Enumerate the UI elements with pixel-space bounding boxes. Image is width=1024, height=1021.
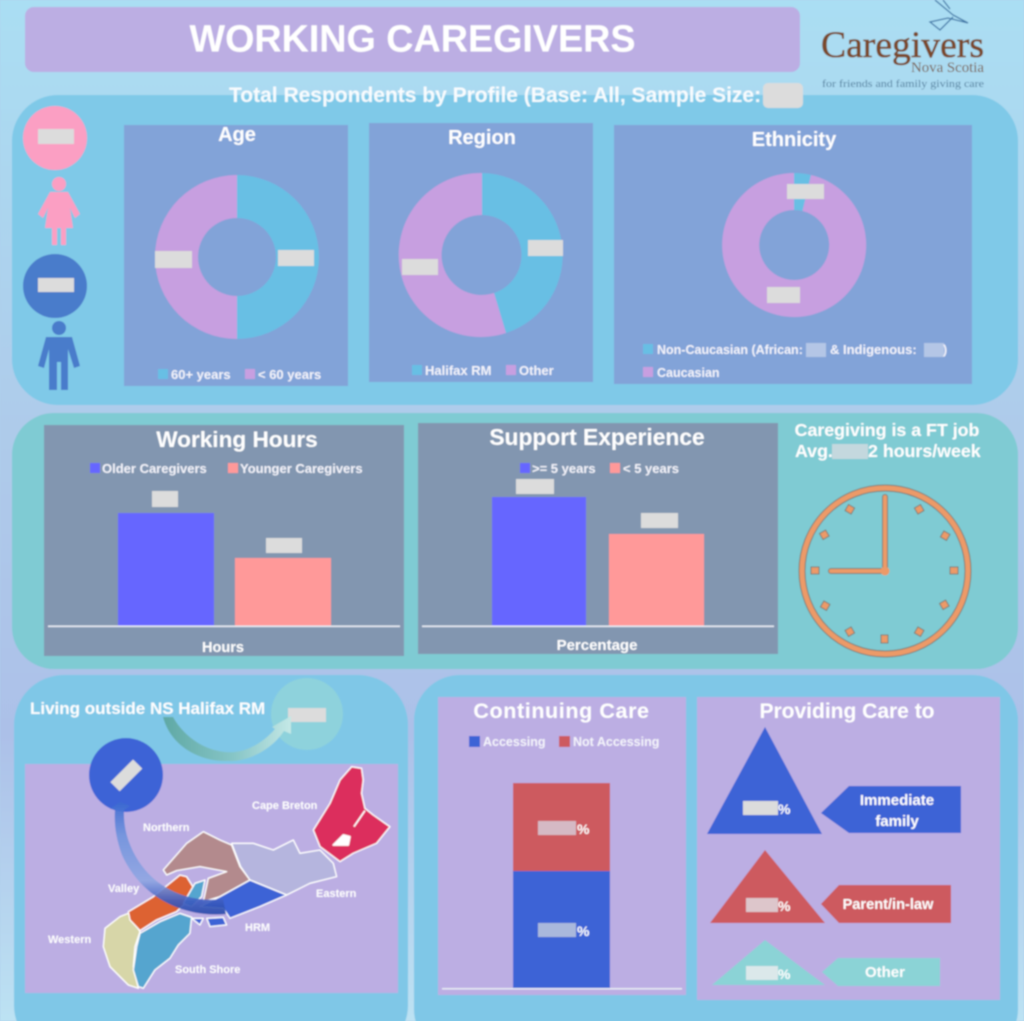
panel: region donut chart: Other (519, 363, 554, 378)
callout: immediate family: family (875, 813, 919, 830)
callout: immediate family (821, 786, 961, 833)
title banner: WORKING CAREGIVERS (190, 18, 636, 60)
bar chart: working hours: Older Caregivers (102, 461, 207, 476)
callout: other: Other (865, 964, 905, 981)
triangle: parent in-law (710, 850, 825, 923)
bar chart: support experience (418, 423, 778, 654)
map region labels: Western (48, 934, 91, 946)
callout: other (822, 958, 940, 986)
circle: Halifax percentage (271, 678, 343, 750)
triangle: parent in-law: % (778, 898, 791, 914)
bar chart: working hours: Hours (202, 640, 244, 656)
bar chart: support experience: Percentage (557, 637, 637, 654)
triangle: other (712, 940, 825, 985)
panel: total respondents (12, 83, 1018, 405)
callout: caregiving hours: Avg. (795, 441, 833, 461)
callout: parent in-law: Parent/in-law (843, 897, 934, 913)
map background (25, 764, 398, 993)
panel: age donut chart (124, 124, 348, 386)
callout: immediate family: Immediate (860, 792, 934, 809)
logo: Caregivers Nova Scotia: Caregivers (821, 25, 984, 66)
callout: parent in-law (821, 885, 951, 923)
triangle: immediate family: % (778, 801, 791, 817)
title banner (25, 7, 800, 72)
stacked bar chart: continuing care: Continuing Care (473, 699, 650, 723)
panel: providing care to (697, 697, 1000, 1000)
panel: ethnicity donut chart (614, 125, 972, 384)
stacked bar chart: continuing care: % (577, 923, 590, 939)
male icon with percentage (23, 254, 87, 390)
panel: working time (12, 413, 1018, 669)
bar chart: working hours: Younger Caregivers (240, 461, 363, 476)
stacked bar chart: continuing care: % (577, 821, 590, 837)
map region labels: South Shore (175, 964, 240, 976)
triangle: other: % (778, 966, 791, 982)
logo: Caregivers Nova Scotia (821, 0, 984, 90)
panel: region donut chart: Region (448, 127, 516, 149)
map region labels: Northern (143, 822, 190, 834)
panel: living outside Halifax (14, 675, 408, 1021)
logo: Caregivers Nova Scotia: for friends and family giving care (822, 79, 984, 90)
stacked bar chart: continuing care (438, 697, 686, 995)
stacked bar chart: continuing care: Not Accessing (573, 735, 659, 749)
triangle: immediate family (707, 727, 822, 834)
bar chart: support experience: < 5 years (623, 461, 679, 476)
arrow: blue curve (110, 802, 226, 914)
icon: clock (802, 488, 968, 654)
logo: Caregivers Nova Scotia: Nova Scotia (911, 60, 984, 76)
map region labels: HRM (245, 922, 270, 934)
stacked bar chart: continuing care: Accessing (483, 735, 546, 749)
panel: age donut chart: 60+ years (171, 367, 231, 382)
panel: ethnicity donut chart: Ethnicity (752, 129, 837, 151)
panel: age donut chart: < 60 years (258, 367, 321, 382)
bar chart: working hours: Working Hours (156, 427, 318, 452)
panel: ethnicity donut chart: ) (943, 343, 947, 357)
heading: living outside: Living outside NS Halifax RM (30, 699, 265, 718)
map region labels: Eastern (316, 888, 357, 900)
map region labels (48, 800, 357, 976)
bar chart: support experience: Support Experience (489, 424, 705, 450)
callout: caregiving hours (795, 420, 981, 461)
panel: ethnicity donut chart: Non-Caucasian (African: (657, 343, 803, 357)
callout: caregiving hours: Caregiving is a FT job (795, 420, 980, 440)
bar chart: working hours (44, 425, 404, 656)
subtitle: total respondents: Total Respondents by Profile (Base: All, Sample Size: (229, 84, 761, 107)
panel: ethnicity donut chart: Caucasian (657, 366, 720, 380)
map of Nova Scotia (103, 767, 390, 988)
panel: ethnicity donut chart: & Indigenous: (830, 342, 917, 357)
panel: care details (414, 675, 1018, 1021)
circle: outside percentage (89, 738, 163, 812)
bar chart: support experience: >= 5 years (532, 461, 596, 476)
callout: caregiving hours: 2 hours/week (868, 441, 981, 461)
map region labels: Valley (108, 883, 140, 895)
panel: providing care to: Providing Care to (759, 700, 935, 723)
panel: region donut chart (369, 123, 593, 382)
arrow: teal curve (163, 716, 291, 761)
female icon with percentage (23, 106, 87, 245)
panel: age donut chart: Age (218, 124, 256, 146)
map region labels: Cape Breton (252, 800, 318, 812)
panel: region donut chart: Halifax RM (425, 363, 491, 378)
